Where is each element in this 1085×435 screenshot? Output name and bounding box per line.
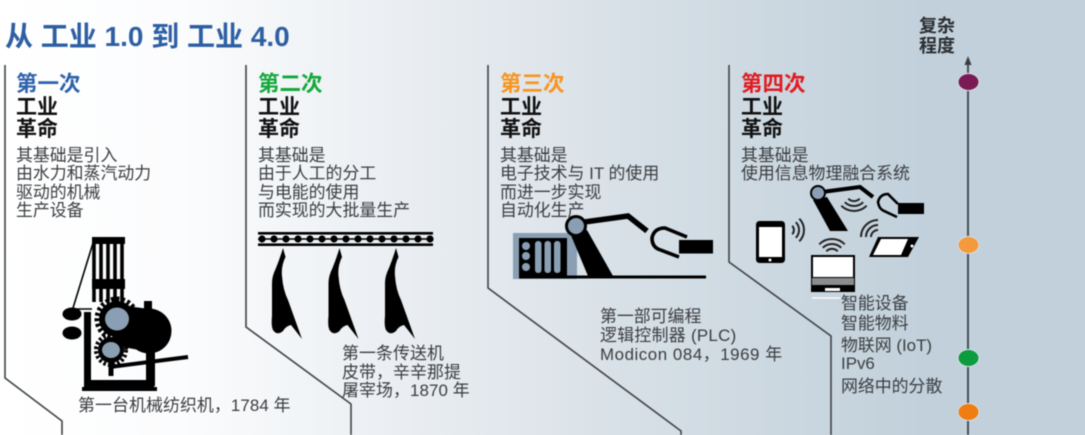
heading: second: 第二次 — [258, 72, 323, 96]
icon: tablet — [861, 220, 919, 257]
text: fourth description: 其基础是 — [741, 146, 809, 165]
panel: first industrial revolution — [5, 65, 291, 435]
caption: first conveyor: 屠宰场，1870 年 — [342, 381, 470, 400]
text: fourth technologies list: IPv6 — [841, 354, 875, 373]
text: third description: 其基础是 — [500, 146, 568, 165]
text: first description: 生产设备 — [16, 201, 84, 220]
panel: second industrial revolution — [246, 65, 470, 435]
heading: industrial revolution 1: 革命 — [16, 117, 58, 141]
caption: first PLC: Modicon 084，1969 年 — [600, 345, 783, 364]
panel: third industrial revolution — [488, 65, 783, 435]
text: fourth technologies list: 网络中的分散 — [841, 377, 942, 396]
heading: industrial revolution 3: 工业 — [500, 96, 542, 119]
text: first description: 由水力和蒸汽动力 — [16, 164, 151, 183]
heading: industrial revolution 1: 工业 — [16, 96, 58, 119]
heading: industrial revolution 2: 工业 — [258, 96, 300, 119]
text: third description: 电子技术与 IT 的使用 — [500, 163, 659, 183]
text: fourth technologies list: 物联网 (IoT) — [841, 336, 932, 355]
icon: robot arm — [519, 216, 713, 277]
caption: first loom: 第一台机械纺织机，1784 年 — [78, 396, 291, 415]
icon: smartphone — [756, 219, 804, 263]
icon: conveyor belt — [258, 232, 434, 246]
text: fourth description: 使用信息物理融合系统 — [741, 163, 910, 183]
heading: industrial revolution 4: 革命 — [741, 117, 783, 141]
heading: industrial revolution 3: 革命 — [500, 117, 542, 141]
heading: fourth: 第四次 — [741, 72, 806, 96]
icon: hanging carcasses — [272, 248, 415, 339]
panel: fourth industrial revolution — [729, 65, 942, 435]
text: second description: 与电能的使用 — [258, 182, 359, 202]
text: second description: 而实现的大批量生产 — [258, 201, 410, 220]
text: first description: 驱动的机械 — [16, 183, 101, 202]
heading: first: 第一次 — [16, 72, 81, 96]
timeline: complexity axis — [958, 56, 979, 435]
text: fourth technologies list: 智能设备 — [841, 294, 909, 313]
text: third description: 自动化生产 — [500, 201, 584, 220]
caption: first PLC: 第一部可编程 — [600, 307, 701, 326]
icon: connected robot arm — [811, 186, 924, 231]
marker: green — [958, 350, 979, 366]
caption: first conveyor: 第一条传送机 — [342, 344, 444, 363]
heading: industrial revolution 4: 工业 — [741, 96, 783, 119]
axis label: complexity: 复杂 — [919, 16, 955, 36]
heading: industrial revolution 2: 革命 — [258, 117, 300, 141]
heading: third: 第三次 — [500, 72, 565, 96]
text: second description: 其基础是 — [258, 146, 326, 165]
caption: first conveyor: 皮带，辛辛那提 — [342, 363, 461, 382]
axis label: complexity: 程度 — [919, 36, 955, 56]
icon: laptop — [811, 239, 855, 298]
caption: first PLC: 逻辑控制器 (PLC) — [600, 326, 737, 345]
title: 从 工业 1.0 到 工业 4.0 — [5, 21, 290, 52]
marker: orange bottom — [958, 404, 979, 420]
text: fourth technologies list: 智能物料 — [841, 314, 909, 333]
icon: PLC cabinet — [513, 233, 577, 279]
text: third description: 而进一步实现 — [500, 183, 601, 202]
text: second description: 由于人工的分工 — [258, 164, 376, 183]
marker: purple — [958, 74, 979, 90]
marker: orange top — [958, 236, 979, 254]
text: first description: 其基础是引入 — [16, 146, 117, 165]
icon: mechanical loom — [62, 237, 188, 391]
